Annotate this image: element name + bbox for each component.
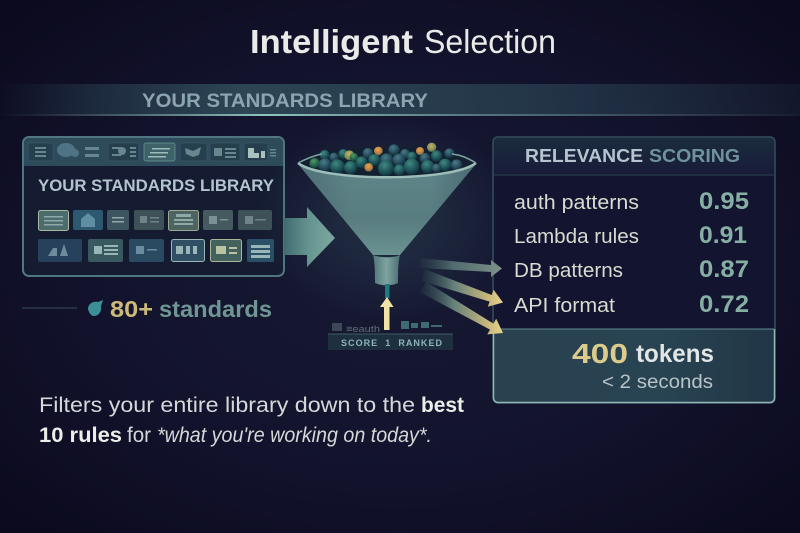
row: auth patterns: auth patterns — [514, 192, 639, 214]
arrow: library into funnel — [284, 207, 335, 267]
latency: < 2 seconds — [602, 372, 713, 393]
score label bar — [328, 334, 453, 350]
token count — [572, 338, 714, 369]
scoring heading: SCORING — [649, 145, 740, 166]
row: api format: 0.72 — [699, 291, 749, 318]
description line 2 — [39, 424, 432, 447]
banner heading: YOUR STANDARDS LIBRARY — [142, 91, 428, 112]
title: Intelligent — [250, 23, 413, 60]
description line 2: for — [127, 424, 151, 447]
standards cards row 2 — [38, 239, 274, 262]
scoring heading — [525, 145, 740, 166]
standards balls — [309, 143, 462, 176]
title — [250, 23, 556, 60]
panel: relevance scoring — [493, 137, 775, 403]
score label text: SCORE 1 RANKED — [341, 338, 442, 348]
row: lambda rules: Lambda rules — [514, 226, 639, 248]
description text — [39, 394, 464, 447]
title: Selection — [424, 23, 556, 60]
row: auth patterns — [514, 188, 749, 215]
funnel rim — [298, 163, 476, 177]
arrow: db patterns — [420, 258, 502, 277]
row: lambda rules — [514, 222, 747, 249]
arrow: token output — [420, 282, 503, 334]
scoring heading: RELEVANCE — [525, 145, 643, 166]
section banner: your standards library — [0, 84, 800, 116]
row: api format — [514, 291, 749, 318]
funnel interior — [299, 148, 475, 178]
row: db patterns: 0.87 — [699, 256, 749, 283]
query chips: ≡eauth — [346, 324, 380, 335]
score ranked label — [328, 321, 453, 350]
icon: standards badge — [88, 300, 103, 316]
description line 2: *what you're working on today*. — [157, 424, 432, 447]
token count: 400 — [572, 338, 628, 369]
scoring footer — [494, 329, 774, 402]
standards cards row 1 — [38, 210, 272, 230]
arrow: api format — [421, 269, 503, 307]
token count: tokens — [636, 340, 714, 368]
funnel with standards — [257, 110, 517, 320]
row: lambda rules: 0.91 — [699, 222, 747, 249]
description line 1: Filters your entire library down to the — [39, 394, 415, 417]
description line 2: 10 rules — [39, 424, 122, 447]
stat value: 80+ — [110, 296, 153, 322]
arrow: score feeding funnel — [380, 297, 394, 330]
stat: 80+ standards — [22, 296, 272, 322]
panel toolbar strip — [24, 138, 283, 166]
row: db patterns — [514, 256, 749, 283]
funnel outlet — [385, 284, 390, 298]
row: auth patterns: 0.95 — [699, 188, 749, 215]
stat label: standards — [159, 296, 272, 322]
panel heading: YOUR STANDARDS LIBRARY — [38, 176, 275, 195]
panel: standards library — [23, 137, 284, 276]
row: db patterns: DB patterns — [514, 260, 623, 282]
scoring header — [494, 138, 774, 175]
funnel cone — [298, 164, 476, 255]
description line 1: best — [421, 394, 464, 417]
row: api format: API format — [514, 295, 615, 317]
funnel stem — [373, 255, 400, 285]
score rows — [514, 188, 749, 318]
